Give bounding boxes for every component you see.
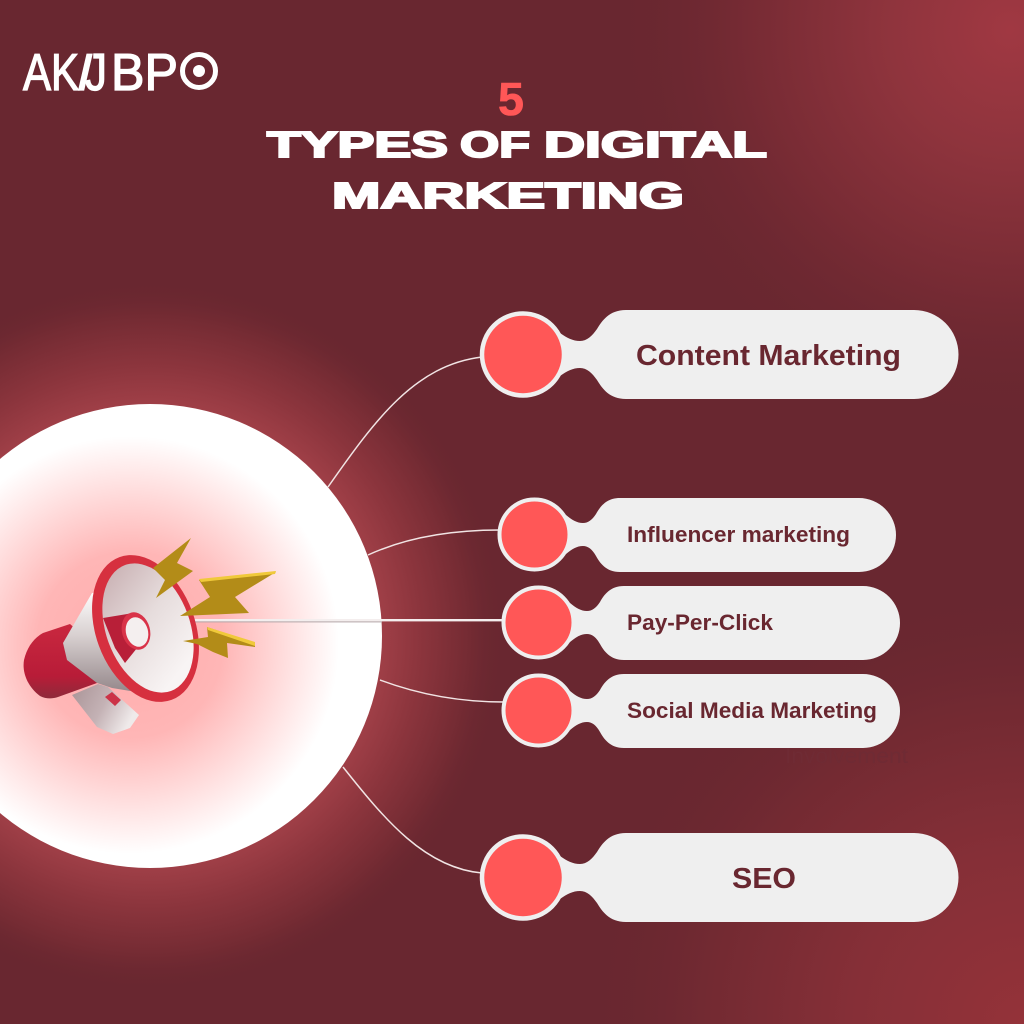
inner tube bbox=[103, 613, 150, 663]
handle bbox=[72, 684, 139, 734]
pill shape bbox=[540, 498, 896, 572]
pill shape bbox=[530, 310, 958, 399]
node circle bbox=[504, 588, 574, 658]
title line 1: DIGITAL bbox=[544, 124, 767, 165]
logo: AKIJBPO bbox=[23, 44, 216, 102]
label: SEO bbox=[732, 863, 796, 895]
title bbox=[267, 73, 767, 216]
pill shape bbox=[544, 586, 900, 660]
node circle bbox=[482, 314, 564, 396]
pill shape bbox=[530, 833, 958, 922]
central white disc bbox=[0, 404, 382, 868]
item: Pay-Per-Click bbox=[504, 586, 900, 660]
icon: megaphone bbox=[24, 540, 218, 734]
logo: AKIJBPO: I bbox=[71, 44, 99, 102]
label: Social Media Marketing bbox=[627, 698, 877, 723]
handle button bbox=[105, 692, 121, 706]
title line 1: TYPES bbox=[267, 124, 448, 165]
node circle bbox=[500, 500, 570, 570]
item: Influencer marketing bbox=[500, 498, 896, 572]
label: Influencer marketing bbox=[627, 522, 850, 547]
item: Content Marketing bbox=[482, 310, 958, 399]
node circle bbox=[482, 836, 564, 918]
logo: AKIJBPO: BP bbox=[111, 44, 178, 102]
label: Pay-Per-Click bbox=[627, 610, 774, 635]
node circle bbox=[504, 676, 574, 746]
red rim bbox=[73, 540, 218, 717]
logo: AKIJBPO: AK bbox=[23, 44, 79, 102]
white cone bbox=[63, 590, 160, 691]
faint hidden text behind pill: Involvement bbox=[785, 745, 908, 768]
speaker cap bbox=[122, 615, 152, 649]
item: SEO bbox=[482, 833, 958, 922]
title line 1: OF bbox=[460, 124, 530, 165]
title line 1 bbox=[267, 124, 767, 165]
line: megaphone to Pay-Per-Click bbox=[186, 619, 505, 622]
connector lines bbox=[328, 357, 504, 873]
red back cylinder bbox=[24, 624, 100, 698]
icon: lightning bolts bbox=[153, 538, 276, 658]
title line 2: MARKETING bbox=[332, 175, 684, 216]
title number: 5 bbox=[498, 73, 524, 125]
item: Social Media Marketing bbox=[504, 674, 900, 748]
inner bell bbox=[86, 551, 210, 705]
pill shape bbox=[544, 674, 900, 748]
label: Content Marketing bbox=[636, 340, 901, 372]
logo: AKIJBPO: J bbox=[85, 44, 107, 102]
